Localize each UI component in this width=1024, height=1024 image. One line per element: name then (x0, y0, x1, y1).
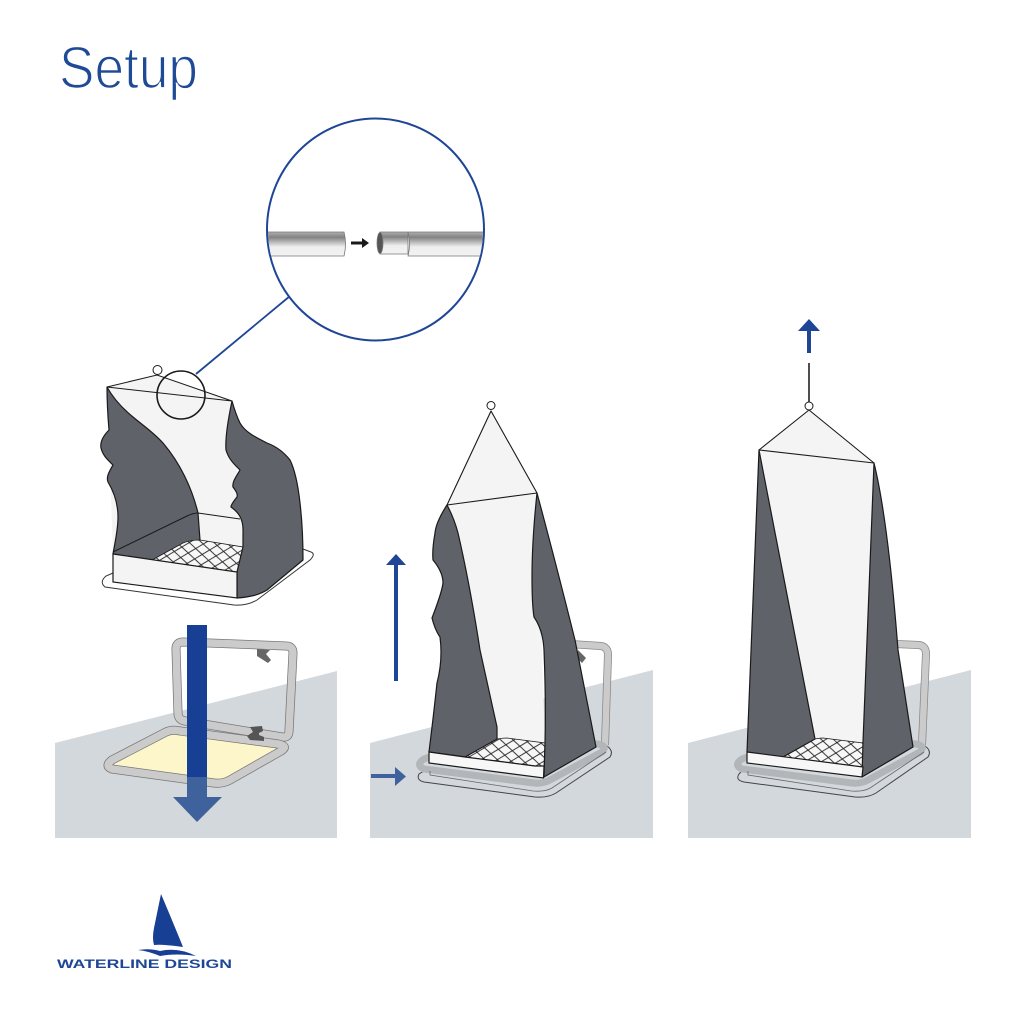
logo: Waterline Design (57, 894, 232, 971)
inner seal line (430, 752, 606, 791)
frame latch (247, 726, 264, 741)
hoist line (808, 363, 810, 402)
peak (759, 410, 874, 463)
cover front band (113, 554, 237, 598)
cover base outline (102, 549, 313, 605)
hatch lid (176, 642, 293, 737)
right fabric (862, 463, 913, 777)
side arrow (371, 767, 406, 786)
hoist ring (805, 402, 813, 410)
hatch lid inner (176, 642, 293, 737)
deck (55, 671, 337, 838)
peak (447, 411, 537, 505)
detail circle (157, 371, 205, 419)
rear fabric (447, 493, 545, 745)
mesh floor (152, 540, 243, 572)
cover rear fabric (107, 387, 243, 560)
pole sections (260, 232, 490, 256)
hatch frame (738, 738, 922, 783)
front band (429, 752, 544, 778)
hoist ring (153, 366, 162, 374)
cover top (107, 375, 232, 401)
mesh floor (465, 738, 545, 767)
hatch frame (420, 738, 604, 783)
left fold line (113, 513, 240, 552)
wave (138, 949, 196, 956)
down arrow lower (173, 775, 222, 822)
hatch lid inner (570, 644, 608, 745)
hoist ring (487, 402, 495, 410)
right fabric (532, 493, 596, 777)
seal outline (738, 746, 929, 797)
inner seal line (748, 752, 924, 791)
up arrow (798, 319, 820, 353)
deck (688, 670, 971, 838)
panel: step 1 deck and hatch (55, 625, 337, 838)
front band (747, 752, 863, 777)
panel: step 2 raising the cover (370, 402, 653, 838)
up arrow (386, 554, 406, 681)
joint arrow (351, 238, 369, 248)
magnifier circle (267, 118, 484, 340)
left fabric (747, 450, 815, 757)
cover left fabric (101, 387, 200, 560)
hatch frame (108, 730, 284, 783)
deck (370, 670, 653, 838)
mesh floor (783, 738, 863, 767)
lid latch (577, 650, 586, 663)
title: Setup (59, 35, 198, 101)
leader line (196, 296, 290, 374)
callout: magnified pole joint (196, 118, 490, 374)
panel: step 3 fully raised (688, 319, 971, 838)
hatch lid (570, 644, 608, 745)
left fabric (429, 505, 497, 757)
hatch lid (895, 644, 926, 745)
wordmark: WATERLINE DESIGN (57, 957, 232, 971)
seal outline (418, 746, 611, 797)
panel: step 1 cover above open hatch (101, 366, 313, 605)
cover right fabric (226, 401, 303, 598)
lid latch (257, 649, 271, 663)
sail (153, 894, 183, 947)
down arrow bar (187, 625, 207, 777)
hatch lid inner (895, 644, 926, 745)
hatch frame inner (108, 730, 284, 783)
rear fabric (759, 450, 874, 743)
